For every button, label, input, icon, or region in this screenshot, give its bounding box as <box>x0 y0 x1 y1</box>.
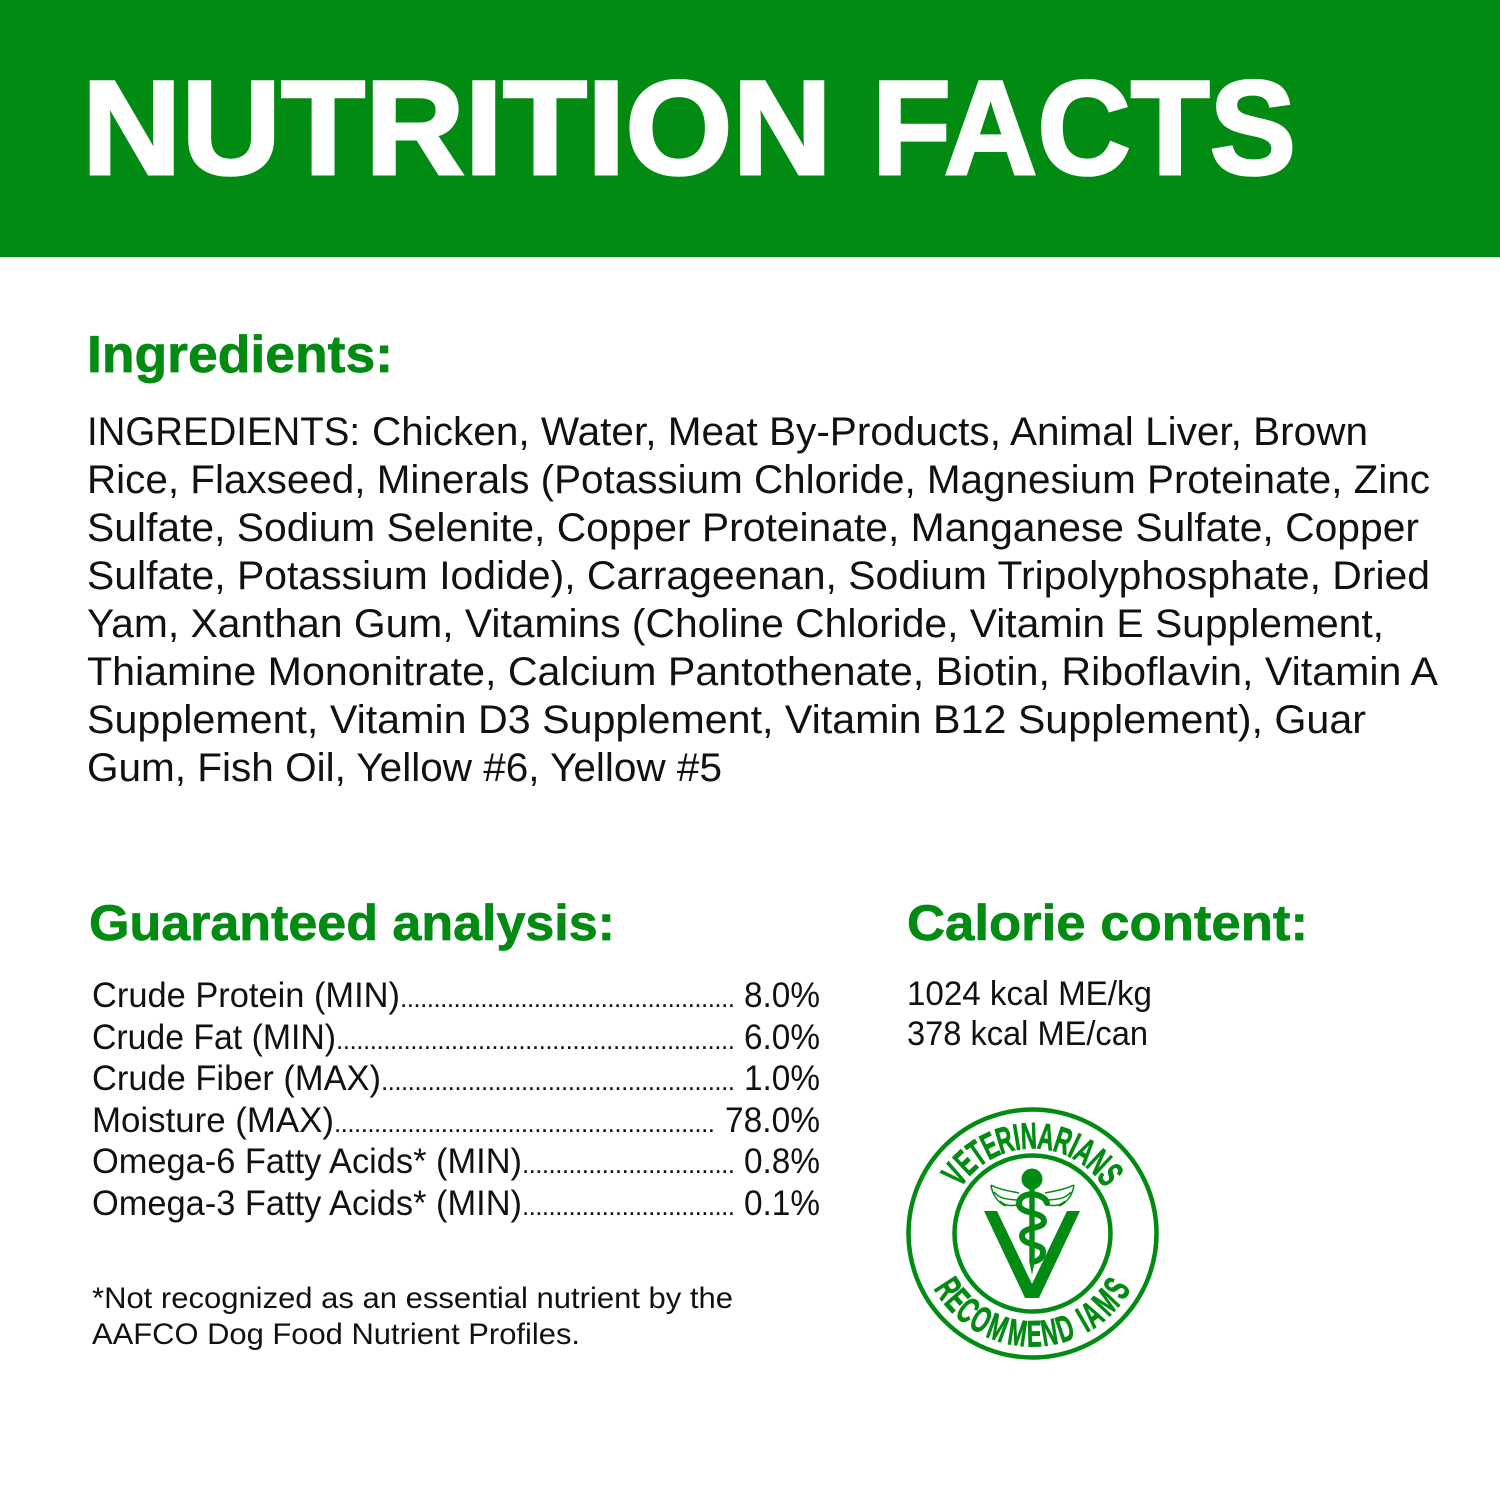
guaranteed analysis table: .................................................. <box>400 983 735 1013</box>
ingredients text block: INGREDIENTS: <box>87 410 360 454</box>
badge arc text: recommend iams: N <box>1038 1311 1061 1355</box>
title: NUTRITION <box>82 54 832 203</box>
guaranteed analysis table: ......................................................... <box>334 1108 715 1138</box>
badge arc text: veterinarians: V <box>934 1156 976 1193</box>
badge arc text: veterinarians: R <box>991 1118 1018 1162</box>
guaranteed analysis table: ..................................................... <box>381 1066 735 1096</box>
guaranteed analysis table: ................................ <box>522 1191 735 1221</box>
badge arc text: recommend iams: A <box>1074 1293 1111 1336</box>
guaranteed analysis table: Omega-6 Fatty Acids* (MIN) <box>92 1142 522 1181</box>
ingredients text block: Gum, Fish Oil, Yellow #6, Yellow #5 <box>87 746 722 790</box>
ingredients text block: Thiamine Mononitrate, Calcium Pantothenate, Biotin, Riboflavin, Vitamin A <box>87 650 1438 694</box>
guaranteed analysis table: 0.8% <box>744 1142 820 1181</box>
badge arc text: recommend iams <box>926 1270 1138 1355</box>
icon: left wing <box>991 1185 1019 1206</box>
badge arc text: recommend iams: E <box>1027 1314 1042 1355</box>
ingredients text block: Yam, Xanthan Gum, Vitamins (Choline Chloride, Vitamin E Supplement, <box>87 602 1384 646</box>
guaranteed analysis table: 1.0% <box>744 1059 820 1098</box>
badge arc text: veterinarians: N <box>1079 1142 1119 1183</box>
icon: veterinary V <box>984 1211 1080 1298</box>
ingredients text block <box>87 410 1438 790</box>
badge arc text: veterinarians: A <box>1035 1116 1057 1159</box>
heading: ingredients: Ingredients: <box>87 326 393 384</box>
guaranteed analysis table: Moisture (MAX) <box>92 1101 334 1140</box>
guaranteed analysis table: 78.0% <box>725 1101 820 1140</box>
footnote <box>92 1282 733 1351</box>
guaranteed analysis table: Crude Fat (MIN) <box>92 1018 336 1057</box>
header banner <box>0 0 1500 257</box>
ingredients text block: Supplement, Vitamin D3 Supplement, Vitamin B12 Supplement), Guar <box>87 698 1366 742</box>
badge arc text: veterinarians: I <box>1010 1117 1023 1159</box>
calorie content values: 378 kcal ME/can <box>907 1015 1148 1053</box>
badge arc text: recommend iams: C <box>948 1290 987 1332</box>
guaranteed analysis table: Crude Fiber (MAX) <box>92 1059 381 1098</box>
title: FACTS <box>872 54 1296 203</box>
guaranteed analysis table: Crude Protein (MIN) <box>92 976 400 1015</box>
badge arc text: recommend iams: D <box>1051 1307 1079 1351</box>
badge: veterinarians recommend iams <box>908 1110 1156 1358</box>
badge arc text: veterinarians: T <box>960 1133 995 1175</box>
footnote: AAFCO Dog Food Nutrient Profiles. <box>92 1318 580 1351</box>
badge arc text: recommend iams: S <box>1096 1271 1138 1306</box>
footnote: *Not recognized as an essential nutrient by the <box>92 1282 733 1315</box>
guaranteed analysis table: 0.1% <box>744 1184 820 1223</box>
heading: calorie content: Calorie content: <box>907 895 1308 951</box>
badge arc text: veterinarians: I <box>1063 1126 1086 1166</box>
calorie content values <box>907 975 1152 1053</box>
badge arc text: recommend iams: M <box>982 1306 1013 1351</box>
badge arc text: veterinarians: R <box>1049 1119 1077 1163</box>
badge arc text: veterinarians: S <box>1089 1157 1131 1193</box>
guaranteed analysis table: Omega-3 Fatty Acids* (MIN) <box>92 1184 522 1223</box>
icon: right wing <box>1045 1185 1074 1206</box>
guaranteed analysis table: ........................................................... <box>336 1025 735 1055</box>
badge arc text: recommend iams: R <box>926 1270 970 1306</box>
badge arc text: recommend iams: M <box>1085 1282 1127 1323</box>
badge arc text: recommend iams: M <box>1005 1311 1030 1355</box>
badge arc text: veterinarians: E <box>974 1124 1006 1168</box>
badge arc text: recommend iams: O <box>963 1298 999 1342</box>
badge arc text: veterinarians: A <box>1067 1130 1103 1173</box>
badge arc text: veterinarians: N <box>1020 1116 1038 1157</box>
badge arc text: veterinarians: E <box>946 1143 985 1183</box>
calorie content values: 1024 kcal ME/kg <box>907 975 1152 1013</box>
badge arc text: recommend iams: E <box>937 1281 977 1320</box>
guaranteed analysis table: 8.0% <box>744 976 820 1015</box>
guaranteed analysis table: ................................ <box>522 1149 735 1179</box>
ingredients text block: Sulfate, Sodium Selenite, Copper Proteinate, Manganese Sulfate, Copper <box>87 506 1419 550</box>
icon: caduceus staff and snake <box>991 1168 1074 1275</box>
guaranteed analysis table: 6.0% <box>744 1018 820 1057</box>
ingredients text block: Sulfate, Potassium Iodide), Carrageenan, Sodium Tripolyphosphate, Dried <box>87 554 1430 598</box>
badge arc text: recommend iams: I <box>1070 1301 1096 1340</box>
heading: guaranteed analysis: Guaranteed analysis: <box>89 895 615 951</box>
ingredients text block: Rice, Flaxseed, Minerals (Potassium Chloride, Magnesium Proteinate, Zinc <box>87 458 1430 502</box>
guaranteed analysis table <box>92 976 820 1223</box>
ingredients text block: Chicken, Water, Meat By-Products, Animal Liver, Brown <box>372 410 1368 454</box>
badge arc text: veterinarians <box>934 1116 1131 1193</box>
